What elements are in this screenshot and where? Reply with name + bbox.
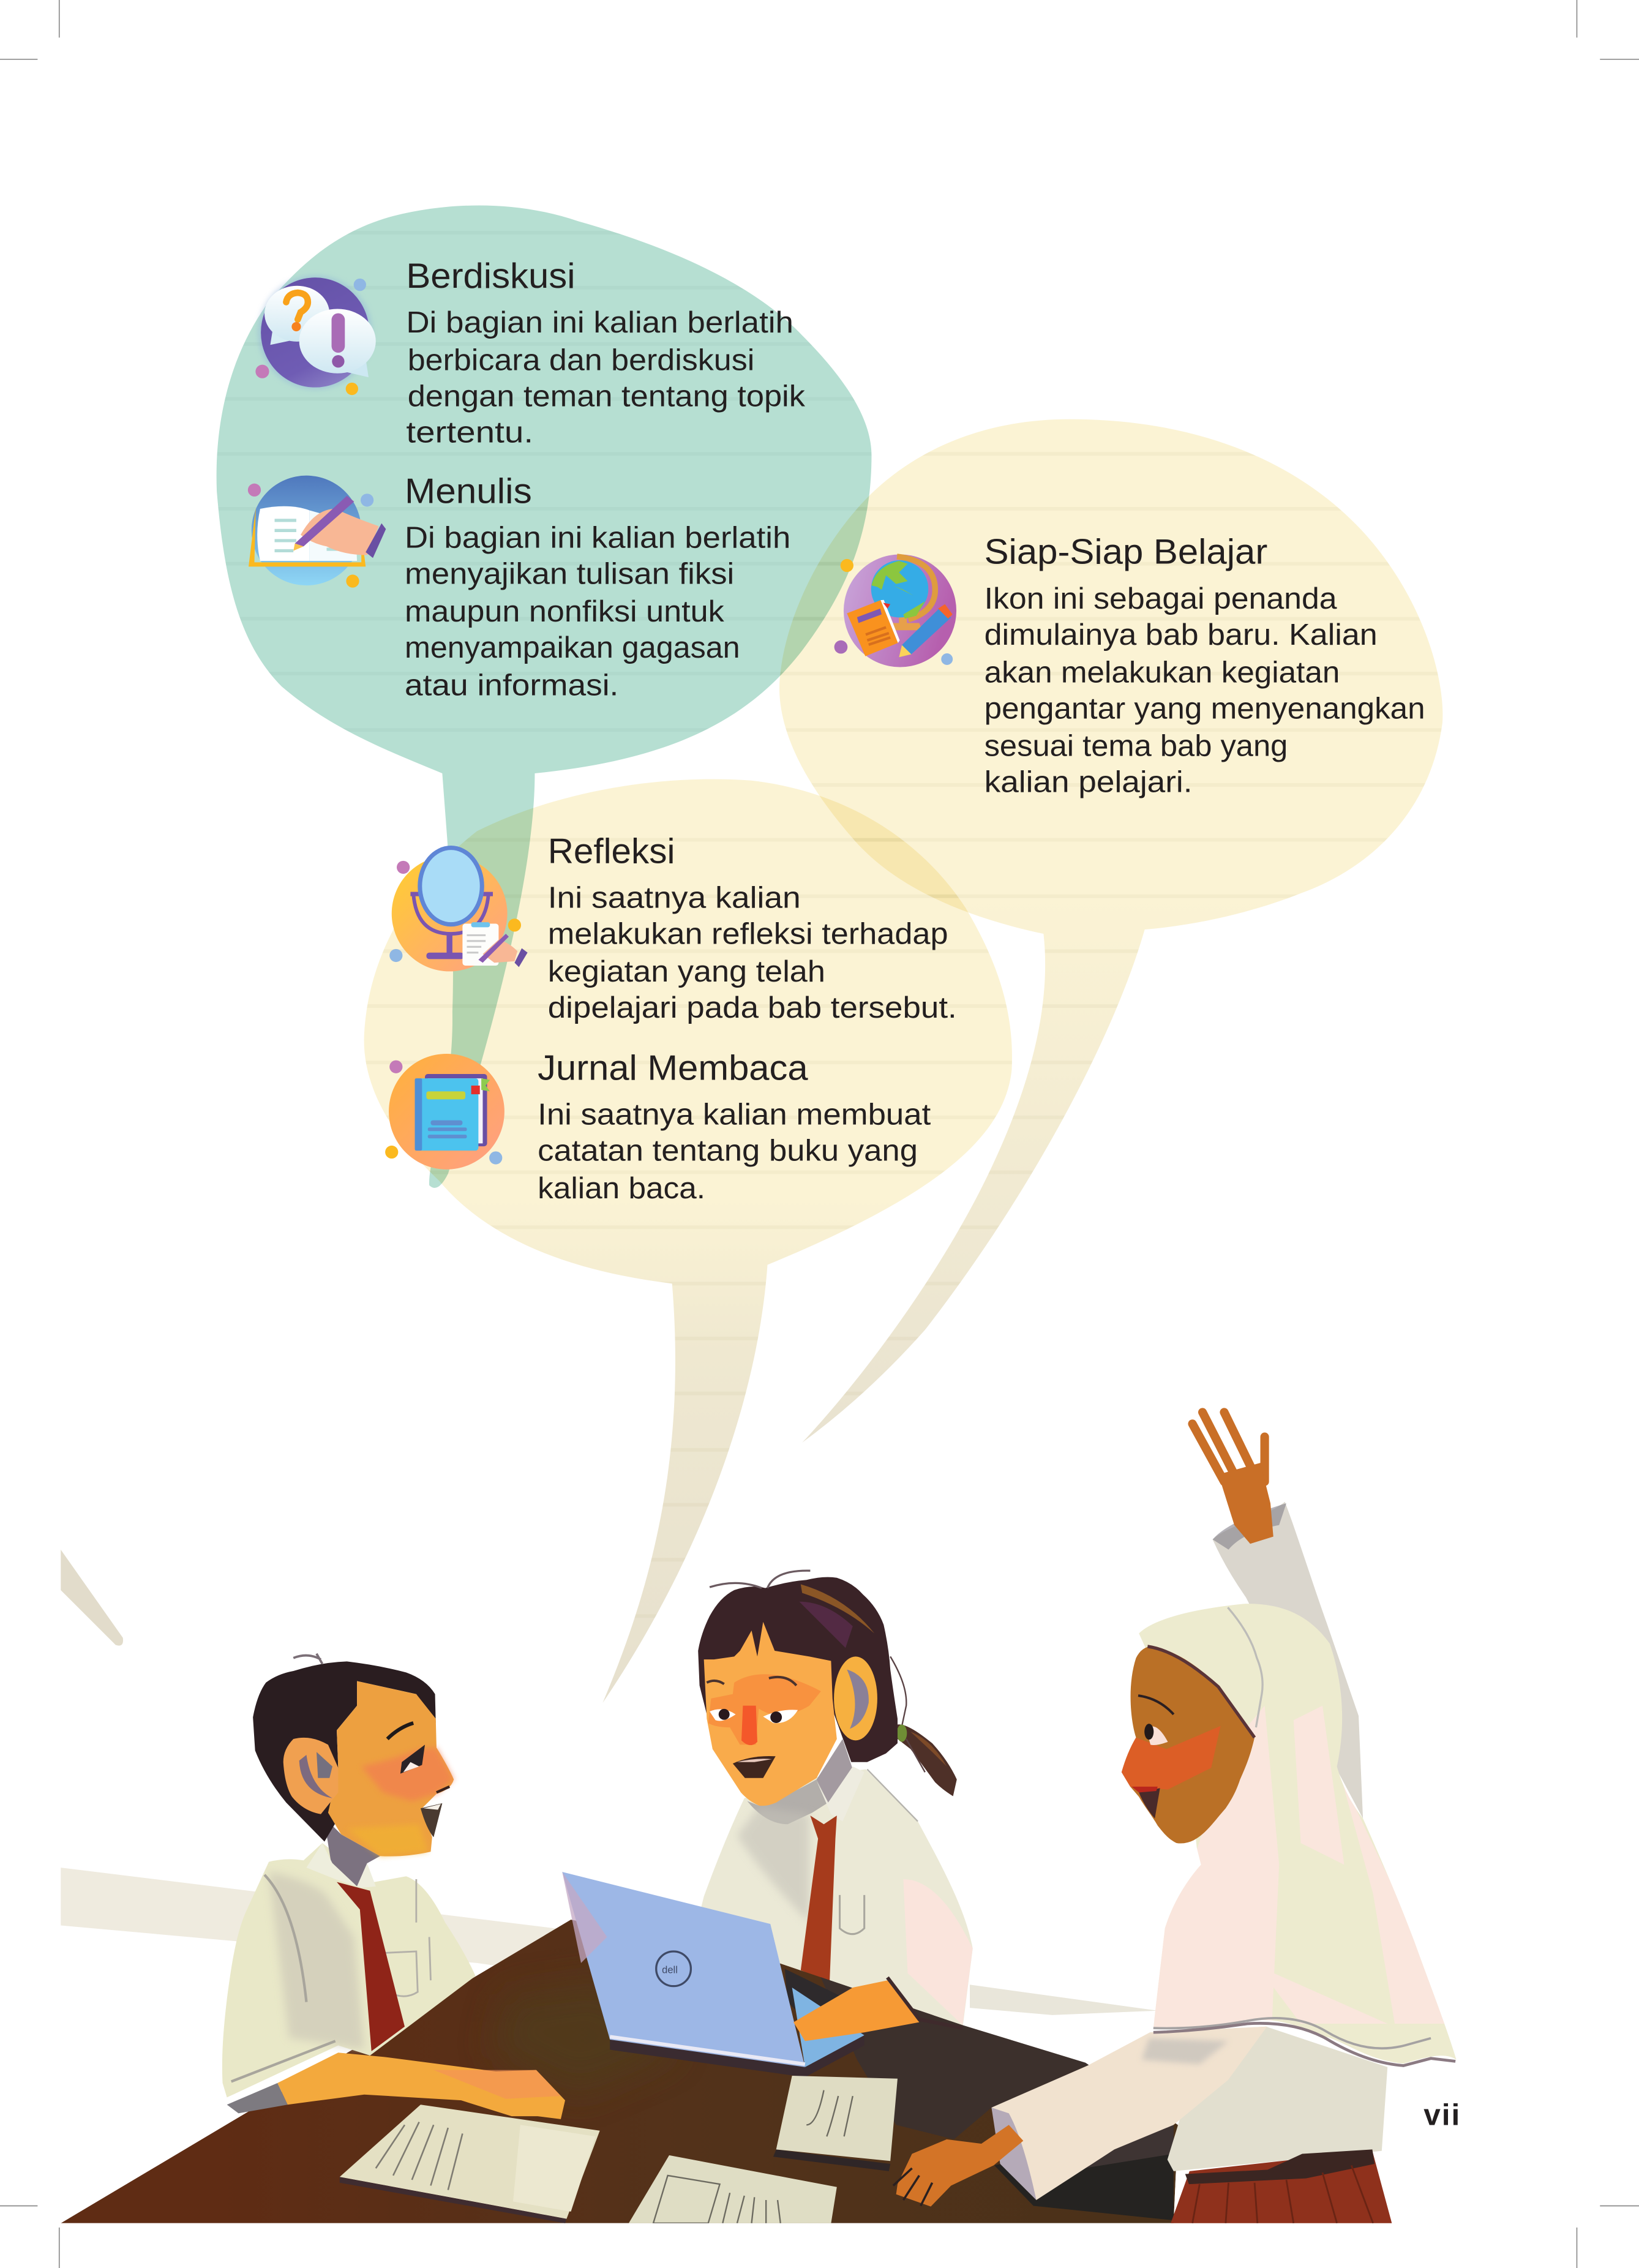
text block: Menulis description: maupun nonfiksi untuk <box>405 594 724 628</box>
illustration: girl's arm on the keyboard <box>793 1977 920 2041</box>
character: boy on the left <box>222 1654 600 2223</box>
text block: Siap-Siap Belajar description: sesuai tema bab yang <box>985 729 1288 763</box>
icon: reading journal book <box>385 1054 504 1170</box>
text block: Berdiskusi description: Di bagian ini kalian berlatih <box>406 305 793 339</box>
text block: Refleksi description: Ini saatnya kalian <box>548 881 801 915</box>
text block: Berdiskusi description <box>406 305 805 449</box>
text block: Jurnal Membaca description: Ini saatnya kalian membuat <box>538 1097 931 1132</box>
illustration: laptop <box>562 1872 865 2077</box>
text block: Jurnal Membaca description <box>538 1097 931 1205</box>
text block: Siap-Siap Belajar description: pengantar yang menyenangkan <box>985 691 1425 725</box>
text block: Siap-Siap Belajar description <box>985 581 1425 799</box>
panel: right yellow speech bubble <box>779 419 1442 1443</box>
text block: Menulis description: menyampaikan gagasan <box>405 630 740 664</box>
text block: Refleksi description: dipelajari pada bab tersebut. <box>548 990 957 1024</box>
text block: Refleksi description: melakukan refleksi terhadap <box>548 917 948 951</box>
character: girl in the middle <box>694 1571 973 2028</box>
heading: Berdiskusi: Berdiskusi <box>406 257 576 296</box>
heading: Menulis: Menulis <box>405 472 532 511</box>
text block: Siap-Siap Belajar description: dimulainya bab baru. Kalian <box>985 617 1378 651</box>
text block: Jurnal Membaca description: catatan tentang buku yang <box>538 1133 918 1168</box>
icon: discussion speech bubbles <box>255 276 376 395</box>
text block: Refleksi description <box>548 881 957 1024</box>
text block: Berdiskusi description: dengan teman tentang topik <box>408 378 805 413</box>
text block: Siap-Siap Belajar description: akan melakukan kegiatan <box>985 655 1340 689</box>
table <box>61 1920 1178 2223</box>
page number: vii <box>1423 2097 1460 2131</box>
illustration: document sheet on table <box>629 2155 837 2223</box>
text block: Berdiskusi description: berbicara dan berdiskusi <box>408 342 754 377</box>
panel: middle yellow speech bubble <box>364 779 1012 1702</box>
character: girl with hijab raising her hand <box>893 1412 1457 2223</box>
text block: Menulis description: menyajikan tulisan fiksi <box>405 557 734 591</box>
illustration: students around a table <box>61 1412 1457 2223</box>
illustration: paper sheet on table <box>773 2076 898 2171</box>
text block: Refleksi description: kegiatan yang telah <box>548 954 825 988</box>
text block: Siap-Siap Belajar description: Ikon ini sebagai penanda <box>985 581 1337 615</box>
heading: Siap-Siap Belajar: Siap-Siap Belajar <box>985 533 1267 572</box>
text block: Jurnal Membaca description: kalian baca. <box>538 1171 705 1205</box>
icon: writing hand on open book <box>248 476 386 588</box>
icon: mirror and clipboard <box>389 846 528 971</box>
text block: Menulis description: Di bagian ini kalian berlatih <box>405 520 790 555</box>
heading: Refleksi: Refleksi <box>548 832 675 871</box>
text block: Siap-Siap Belajar description: kalian pelajari. <box>985 765 1193 799</box>
illustration: laptop: dell <box>662 1964 678 1975</box>
panel: green speech bubble <box>217 206 872 1188</box>
text block: Berdiskusi description: tertentu. <box>406 415 533 449</box>
icon: globe, book and pencil <box>835 554 956 667</box>
text block: Menulis description: atau informasi. <box>405 668 618 702</box>
heading: Jurnal Membaca: Jurnal Membaca <box>538 1048 808 1087</box>
text block: Menulis description <box>405 520 790 702</box>
